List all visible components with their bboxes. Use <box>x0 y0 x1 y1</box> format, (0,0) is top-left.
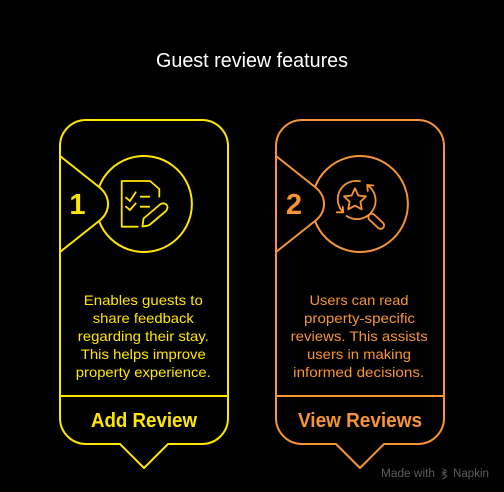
card outline <box>276 120 444 468</box>
footer divider <box>276 395 444 397</box>
description: Users can read <box>310 292 408 308</box>
panel: add review <box>60 120 228 468</box>
description: reviews. This assists <box>291 328 428 344</box>
panel: view reviews <box>276 120 444 468</box>
description: property experience. <box>76 364 211 380</box>
number 2: 2 <box>286 189 302 221</box>
description: share feedback <box>93 310 195 326</box>
icon: star in magnifier with arrows <box>337 181 386 230</box>
description: Enables guests to <box>84 292 203 308</box>
description: informed decisions. <box>293 364 424 380</box>
number tab <box>276 156 324 252</box>
card outline <box>60 120 228 468</box>
icon circle <box>315 156 408 252</box>
number 1: 1 <box>69 189 86 221</box>
watermark: Napkin <box>453 468 489 480</box>
label: add review: Add Review <box>91 410 197 432</box>
description <box>291 292 428 380</box>
number tab <box>60 156 108 252</box>
description: regarding their stay. <box>78 328 209 344</box>
title: Guest review features <box>156 50 348 72</box>
footer divider <box>60 395 228 397</box>
watermark <box>381 468 489 480</box>
description: property-specific <box>304 310 415 326</box>
description: This helps improve <box>81 346 206 362</box>
description <box>76 292 211 380</box>
icon: napkin logo <box>440 468 448 480</box>
icon circle <box>99 156 192 252</box>
watermark: Made with <box>381 468 435 480</box>
icon: checklist with pencil <box>122 181 168 227</box>
label: view reviews: View Reviews <box>298 410 422 432</box>
description: users in making <box>307 346 411 362</box>
